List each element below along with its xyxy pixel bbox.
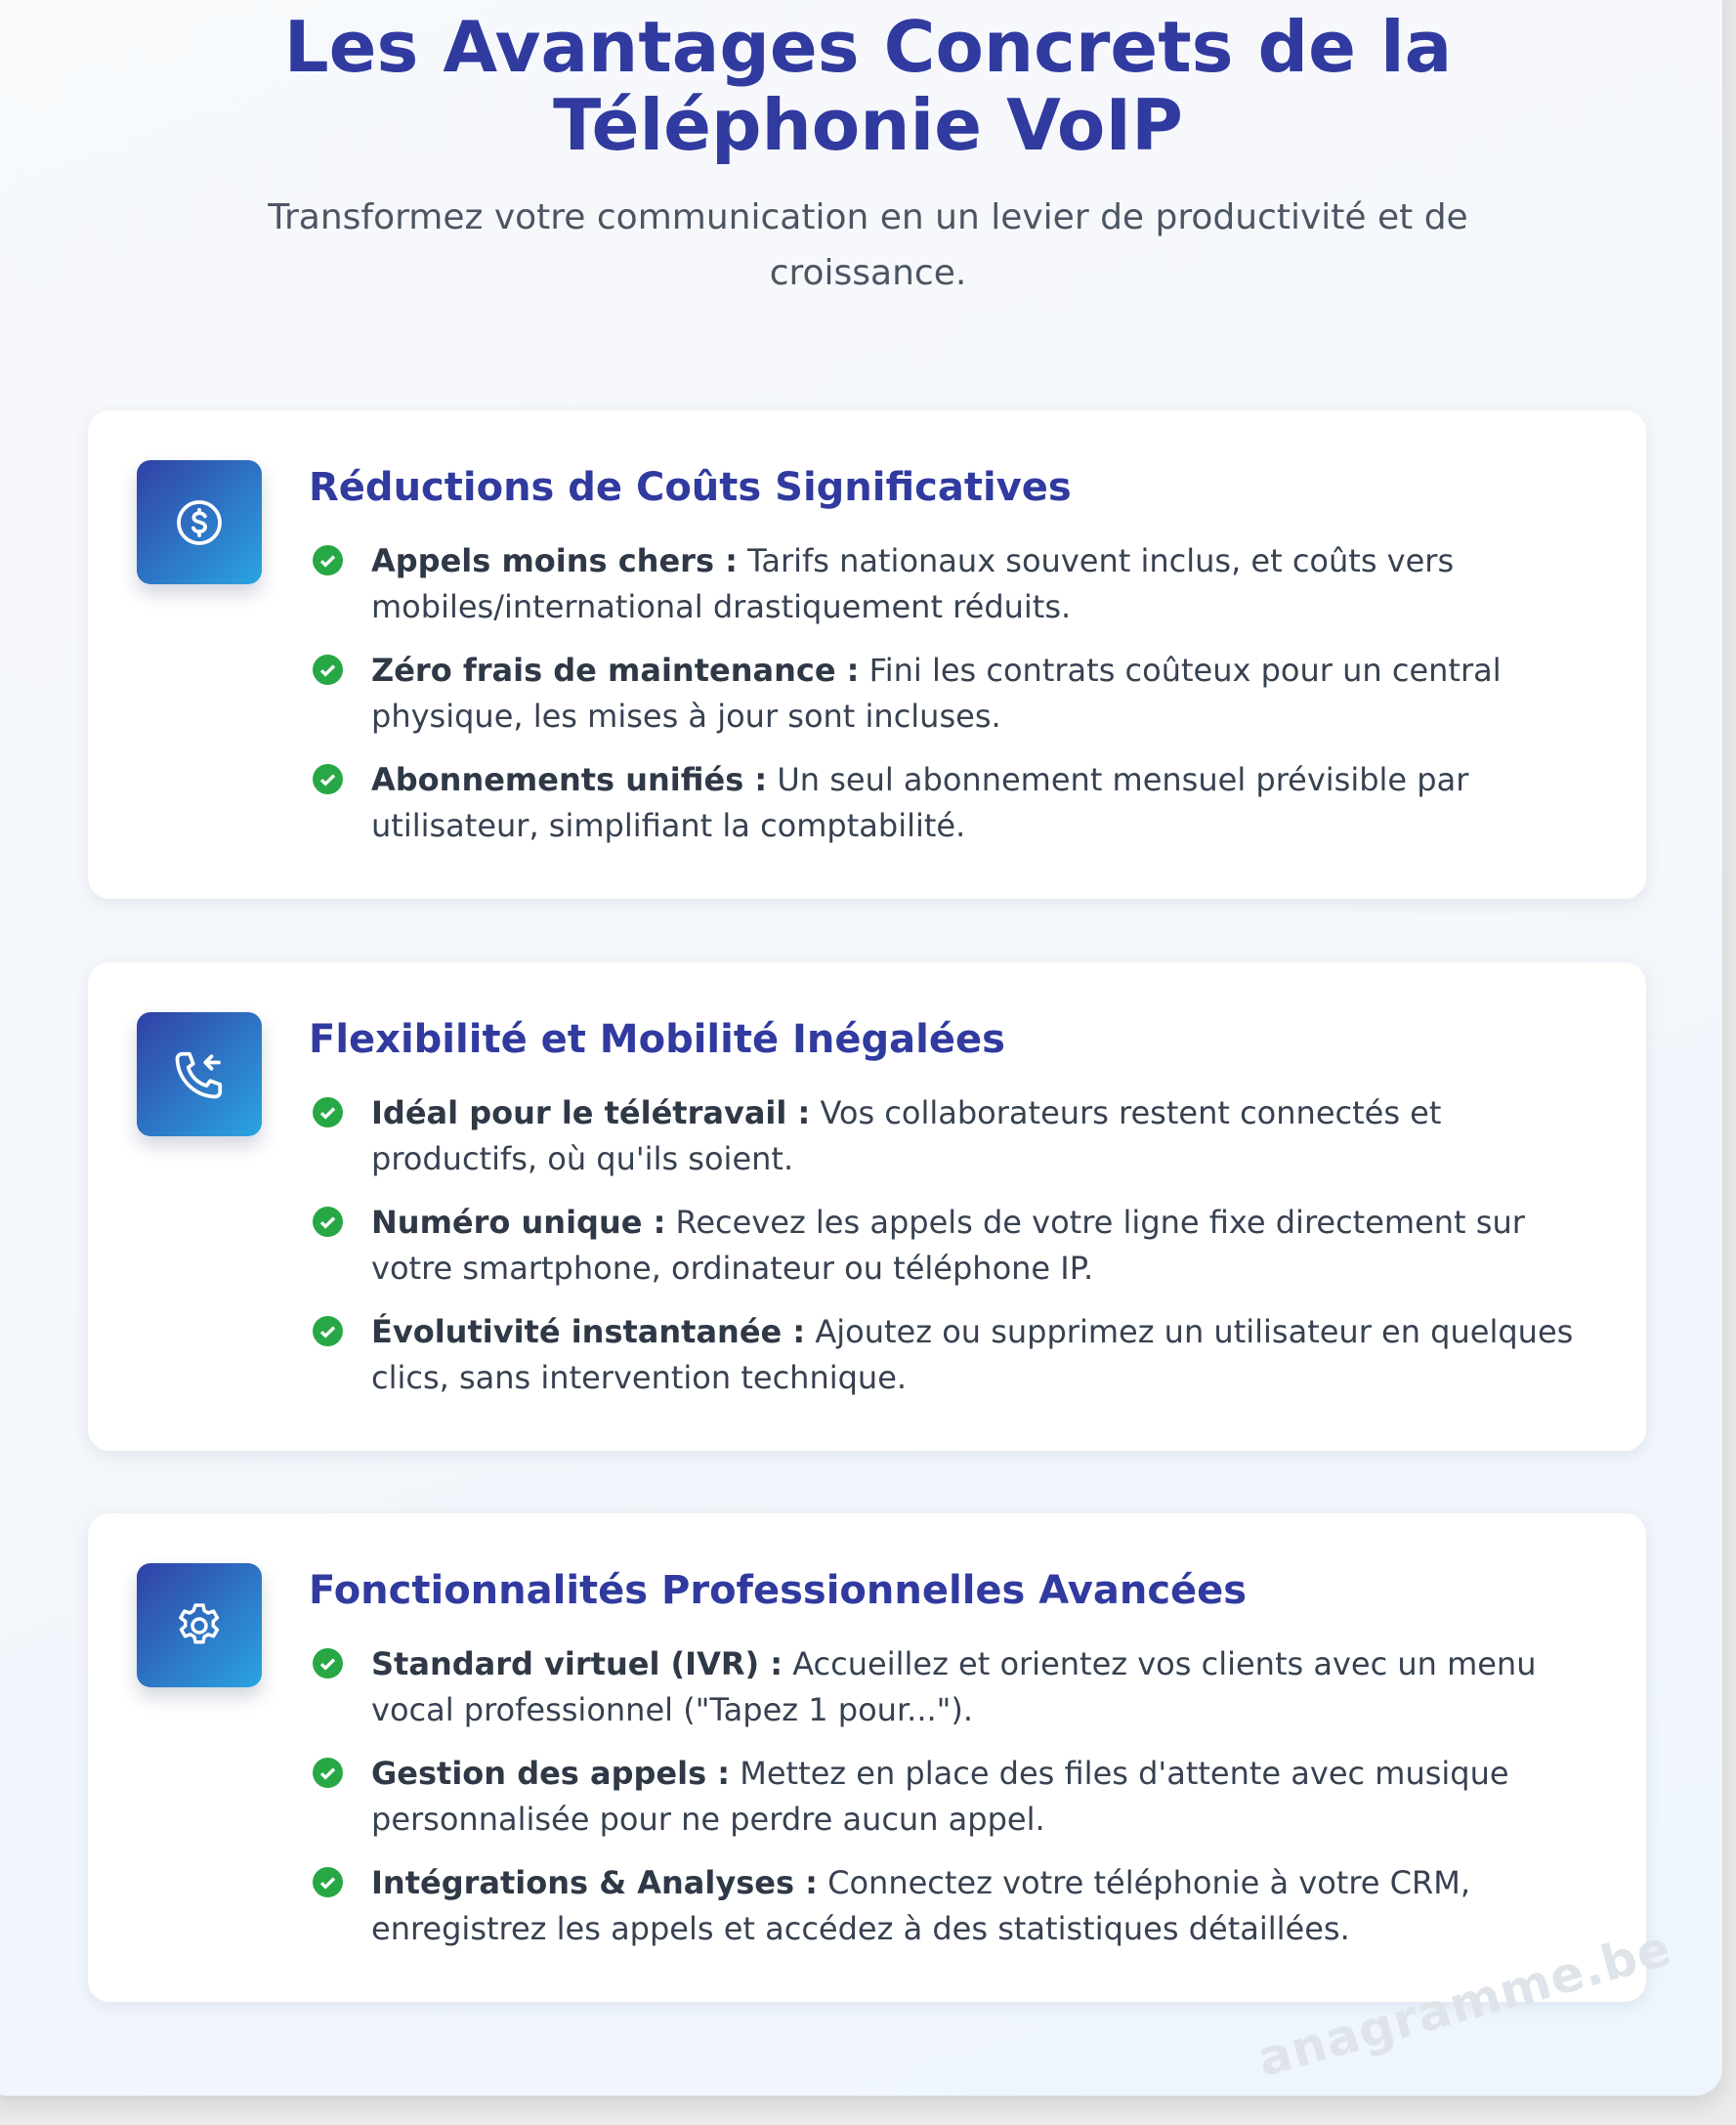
heading: Fonctionnalités Professionnelles Avancées [309,1568,1247,1613]
panel: fonctionnalites: personnalisée pour ne perdre aucun appel. [371,1801,1045,1838]
bullet 3 [313,761,1469,844]
bullet 1 [313,1094,1441,1177]
panel: couts: physique, les mises à jour sont incluses. [371,698,1001,735]
panel: fonctionnalites: enregistrez les appels et accédez à des statistiques détaillées. [371,1910,1350,1947]
bullet 3 [313,1864,1470,1947]
panel: couts: mobiles/international drastiquement réduits. [371,588,1071,625]
panel: couts: Zéro frais de maintenance : Fini les contrats coûteux pour un central [371,652,1502,689]
subtitle: Transformez votre communication en un levier de productivité et de [268,197,1468,237]
heading: Flexibilité et Mobilité Inégalées [309,1017,1005,1062]
subtitle [268,197,1468,293]
title: Les Avantages Concrets de la [284,6,1452,88]
panel: couts: Abonnements unifiés : Un seul abonnement mensuel prévisible par [371,761,1468,798]
bullet 2 [313,1755,1509,1838]
panel: couts: Appels moins chers : Tarifs nationaux souvent inclus, et coûts vers [371,542,1454,579]
subtitle: croissance. [770,253,966,293]
icon: phone [137,1012,262,1136]
panel: fonctionnalites: Gestion des appels : Mettez en place des files d'attente avec musique [371,1755,1509,1792]
panel: mobilite: Numéro unique : Recevez les appels de votre ligne fixe directement sur [371,1204,1525,1241]
panel: fonctionnalites: Intégrations & Analyses : Connectez votre téléphonie à votre CRM, [371,1864,1470,1901]
panel: couts: utilisateur, simplifiant la comptabilité. [371,807,965,844]
watermark: anagramme.be [1251,1920,1677,2088]
panel: fonctionnalites: Standard virtuel (IVR) : Accueillez et orientez vos clients avec un menu [371,1645,1536,1682]
panel: mobilite: Évolutivité instantanée : Ajoutez ou supprimez un utilisateur en quelques [371,1313,1573,1350]
heading: Réductions de Coûts Significatives [309,465,1072,510]
icon: dollar [137,460,262,584]
panel: couts [88,410,1646,899]
title [284,6,1452,166]
panel: fonctionnalites [88,1513,1646,2002]
bullet 3 [313,1313,1573,1396]
bullet 1 [313,542,1454,625]
panel: mobilite: Idéal pour le télétravail : Vos collaborateurs restent connectés et [371,1094,1441,1131]
bullet 2 [313,1204,1525,1287]
panel: fonctionnalites: vocal professionnel ("Tapez 1 pour..."). [371,1691,973,1728]
icon: gear [137,1563,262,1687]
bullet 1 [313,1645,1536,1728]
bullet 2 [313,652,1502,735]
panel: mobilite [88,962,1646,1451]
panel: mobilite: productifs, où qu'ils soient. [371,1140,793,1177]
panel: mobilite: clics, sans intervention technique. [371,1359,907,1396]
title: Téléphonie VoIP [553,84,1183,166]
panel: mobilite: votre smartphone, ordinateur ou téléphone IP. [371,1250,1093,1287]
